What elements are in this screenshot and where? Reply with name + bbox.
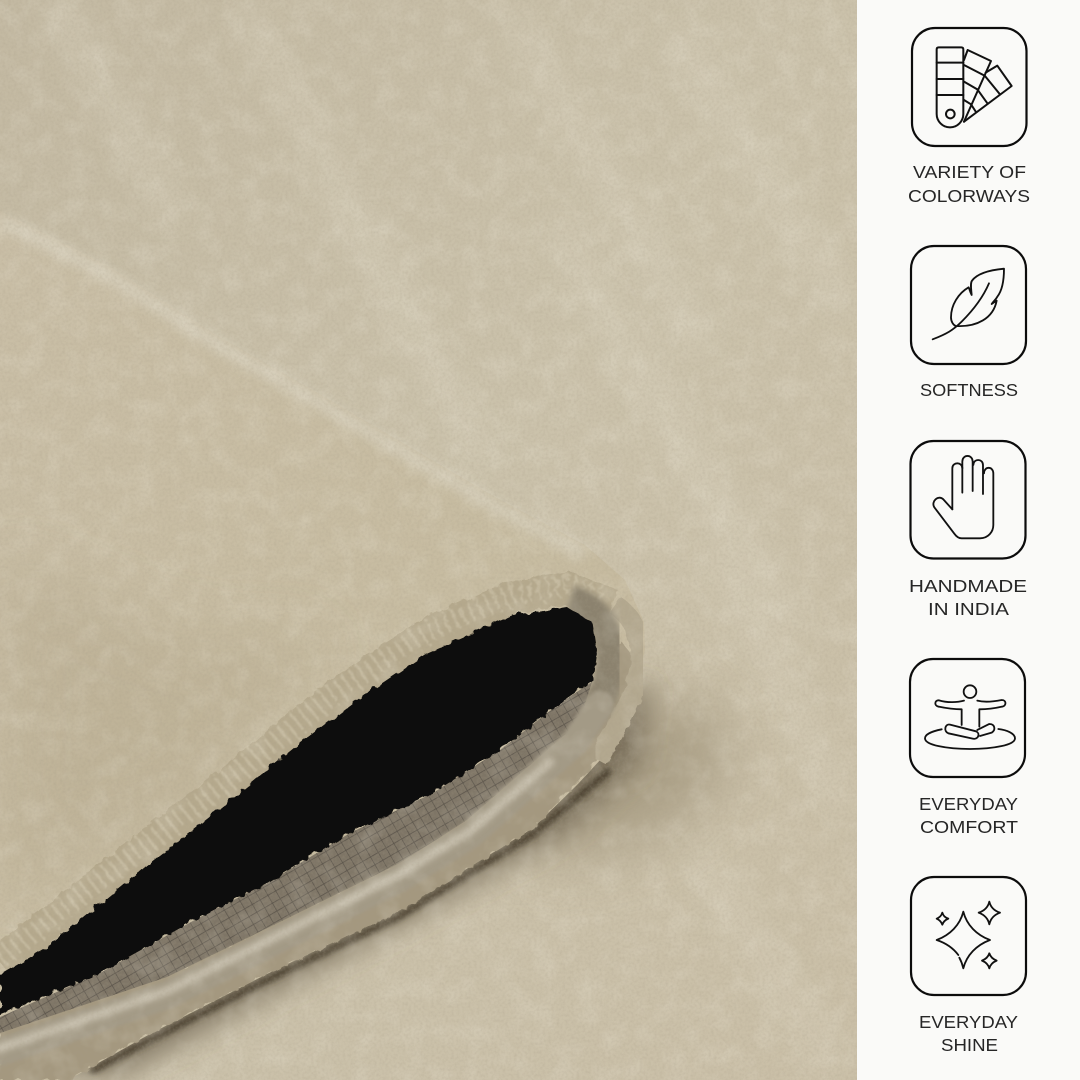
shadow beneath folded rug: [40, 680, 650, 1075]
flap shading: [22, 608, 254, 846]
pile mottling and grain: [0, 0, 857, 1080]
label: everyday shine: EVERYDAY: [919, 1012, 1018, 1032]
label: everyday shine: SHINE: [941, 1035, 998, 1055]
icon: seated meditation figure: [910, 659, 1025, 777]
label: softness: SOFTNESS: [920, 380, 1018, 400]
folded rug flap top: [0, 472, 645, 1080]
rug photograph: [0, 0, 857, 1080]
feature: variety of colorways: [908, 28, 1030, 206]
label: handmade in india: HANDMADE: [909, 576, 1027, 596]
label: handmade in india: IN INDIA: [928, 599, 1009, 619]
label: variety of colorways: [908, 162, 1030, 206]
fold outer rim: [0, 640, 636, 1080]
dark interior of fold: [0, 607, 597, 1015]
rim at fold tip: [565, 600, 641, 760]
feature: everyday comfort: [910, 659, 1025, 837]
label: everyday shine: [919, 1012, 1018, 1055]
flap highlight edge: [0, 220, 585, 554]
feature: everyday shine: [911, 877, 1026, 1055]
white features panel: [857, 0, 1080, 1080]
rope binding: [0, 705, 600, 1052]
label: handmade in india: [909, 576, 1027, 619]
flap bound edge: [0, 584, 612, 962]
label: everyday comfort: COMFORT: [920, 817, 1018, 837]
woven gray backing band: [0, 682, 592, 1033]
icon: sparkles: [911, 877, 1026, 995]
feature: handmade in india: [909, 441, 1027, 619]
feature: softness: [911, 246, 1026, 400]
icon: feather: [911, 246, 1026, 364]
icon: hand: [910, 441, 1026, 558]
label: everyday comfort: EVERYDAY: [919, 794, 1018, 814]
label: variety of colorways: VARIETY OF: [913, 162, 1026, 182]
carpet floor background: [0, 0, 857, 1080]
label: variety of colorways: COLORWAYS: [908, 186, 1030, 206]
label: everyday comfort: [919, 794, 1018, 837]
icon: colour swatch fan: [912, 28, 1026, 146]
